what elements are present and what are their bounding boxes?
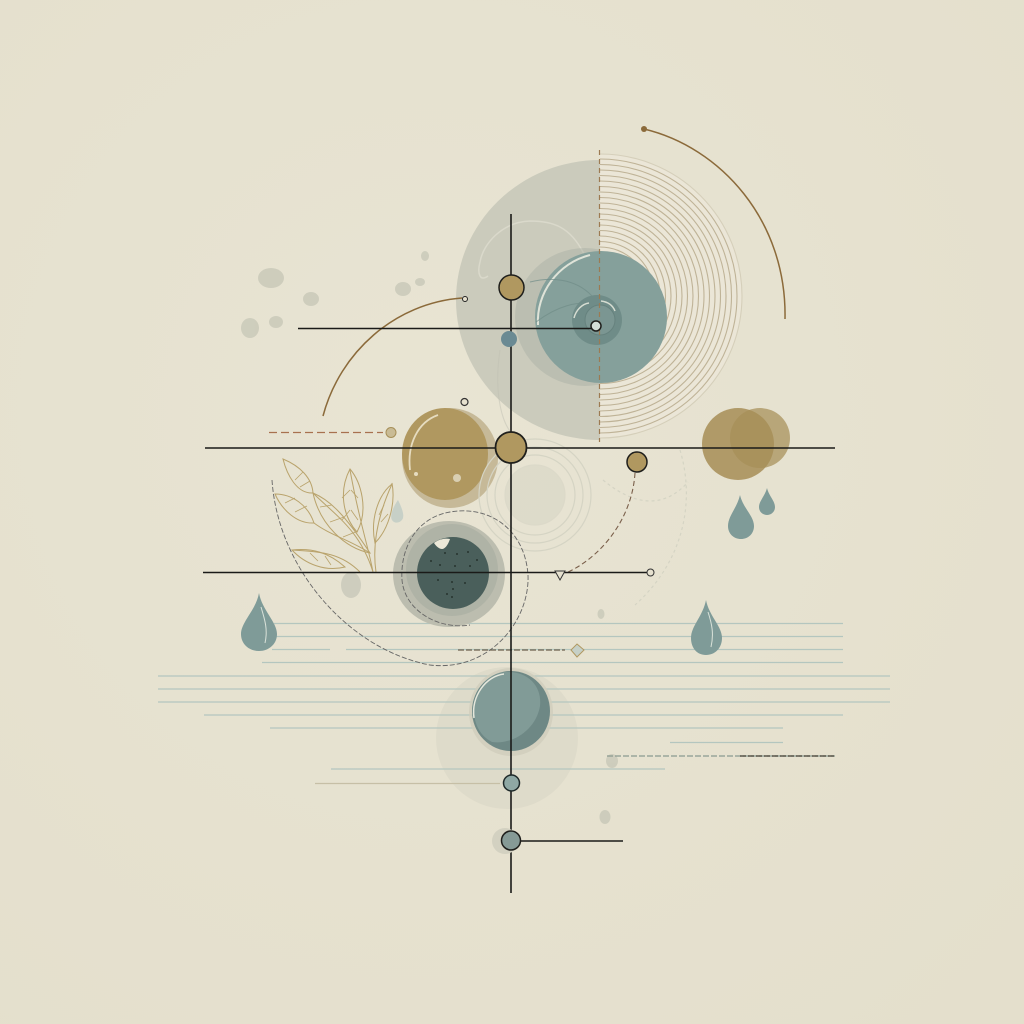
drops — [241, 488, 775, 655]
axis lines — [203, 214, 835, 893]
dashed swirl — [272, 480, 528, 666]
teal circle — [515, 248, 600, 386]
abstract infographic canvas — [158, 126, 890, 893]
top-right arc — [641, 126, 785, 319]
left arc with node — [323, 296, 468, 416]
faint sketch swirl — [479, 439, 688, 605]
concentric arcs — [600, 154, 742, 438]
halo behind large teal circle — [436, 667, 578, 809]
ochre circle left — [402, 408, 498, 508]
faint drops near sprig — [341, 500, 403, 598]
ochre circle right — [702, 408, 790, 480]
large ring disc — [456, 150, 744, 442]
leaf sprig — [275, 459, 393, 572]
inner target — [572, 295, 622, 345]
scattered specks — [241, 251, 618, 824]
dashed connectors — [269, 428, 835, 756]
axis nodes — [461, 275, 654, 854]
left half disc — [456, 160, 600, 440]
drop: far left — [241, 593, 277, 651]
large teal circle — [469, 668, 553, 756]
panel: water lines — [158, 624, 890, 784]
drop: right of centre — [691, 600, 722, 655]
drop: upper right small — [759, 488, 775, 515]
dark target circle — [272, 480, 528, 666]
dashed axis — [598, 150, 600, 442]
drop: upper right large — [728, 495, 754, 539]
